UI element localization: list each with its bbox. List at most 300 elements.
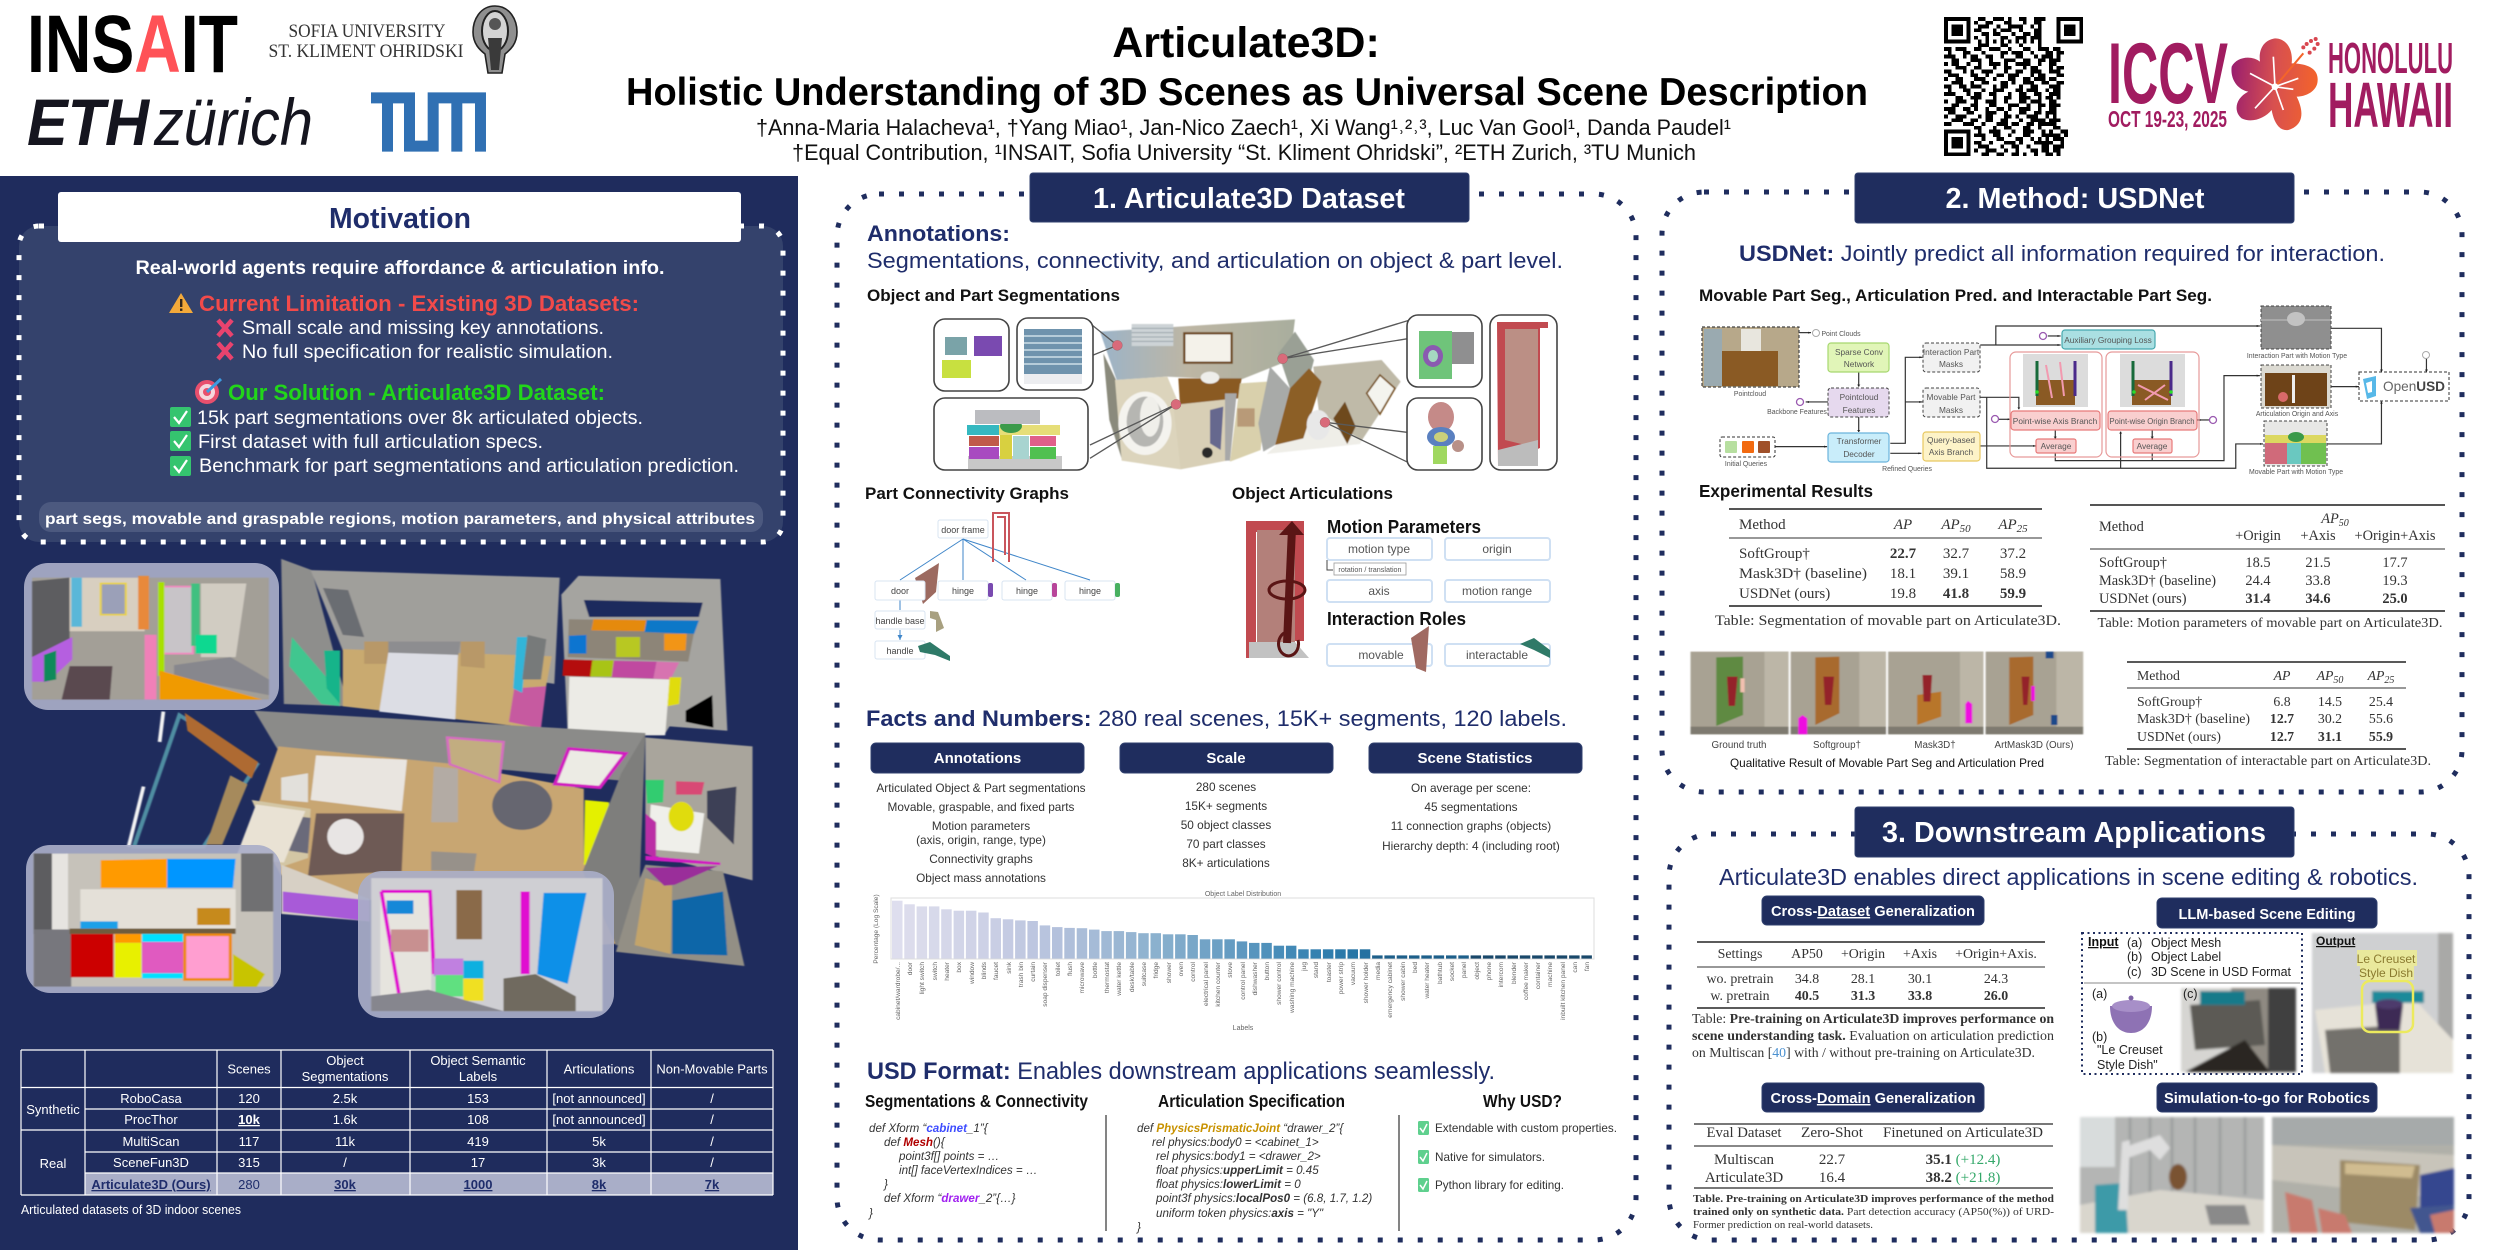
table: articulated datasets: 1.6k (333, 1112, 358, 1127)
diagram wires (1775, 326, 2426, 468)
diagram labels: Initial Queries (1725, 461, 1768, 468)
heading: why USD: Why USD? (1483, 1091, 1562, 1111)
table: interactable part segmentation: SoftGroup† (2137, 694, 2202, 709)
bar chart: object label distribution: container (1535, 961, 1542, 989)
inset: entrance (358, 871, 614, 1018)
column: annotations (871, 743, 1086, 885)
column: scale: Scale (1206, 750, 1246, 767)
table: articulated datasets: Object Semantic (430, 1053, 526, 1068)
text: agents: Real-world agents require affordance & articulation info. (136, 257, 664, 279)
table: interactable part segmentation: 12.7 (2270, 729, 2294, 744)
QR code (1944, 17, 2083, 156)
bar chart: object label distribution: door (907, 961, 914, 975)
text: annotations summary: Segmentations, connectivity, and articulation on object & part level. (867, 248, 1563, 273)
table: articulated datasets: 1000 (464, 1177, 492, 1192)
table: articulated datasets: / (710, 1134, 714, 1149)
table: articulated datasets: 153 (467, 1091, 489, 1106)
callout: toilet (1407, 398, 1482, 470)
bar chart: object label distribution: socket (1449, 962, 1456, 981)
panel: LLM input: Style Dish" (2097, 1058, 2158, 1072)
bar chart: object label distribution: water heater (1424, 961, 1431, 1000)
table: movable part segmentation: 25 (2017, 523, 2028, 535)
bar chart: object label distribution: bed (1412, 962, 1419, 973)
parameter chips: origin (1482, 542, 1512, 556)
bar chart: object label distribution: sink (1006, 961, 1013, 974)
table: interactable part segmentation: AP (2317, 668, 2333, 683)
table: articulated datasets: Segmentations (302, 1069, 389, 1084)
list: why USD: Native for simulators. (1435, 1151, 1545, 1164)
bar chart: object label distribution: fridge (1153, 962, 1160, 978)
bar chart: object label distribution: bathtub (1437, 962, 1444, 984)
qualitative results images: ArtMask3D (Ours) (1995, 740, 2073, 751)
table: articulated datasets: Scenes (227, 1062, 271, 1076)
diagram labels: Movable Part with Motion Type (2249, 469, 2343, 476)
bar chart: object label distribution: jug (1301, 962, 1308, 972)
table: articulated datasets: 3k (592, 1155, 606, 1170)
logo: ICCV Honolulu Hawaii: ICCV (2108, 26, 2228, 122)
table: articulated datasets: Real (40, 1156, 66, 1171)
code: articulation: uniform token physics:axis = "Y" (1156, 1207, 1324, 1220)
column: scene statistics: 45 segmentations (1424, 800, 1518, 814)
text: solution 1: 15k part segmentations over 8k articulated objects. (197, 407, 643, 429)
heading: our solution: Our Solution - Articulate3D Dataset: (228, 380, 605, 405)
table: motion parameters: +Origin (2235, 528, 2281, 544)
graph: part connectivity: handle (886, 646, 914, 656)
graph: part connectivity: door (891, 586, 909, 596)
parameter chips: motion type (1348, 542, 1410, 556)
table: motion parameters: 19.3 (2382, 573, 2408, 589)
authors: †Anna-Maria Halacheva¹, †Yang Miao¹, Jan-Nico Zaech¹, Xi Wang¹˒²˒³, Luc Van Gool¹, Danda Paudel¹ (756, 115, 1731, 140)
text: solution 3: Benchmark for part segmentations and articulation prediction. (199, 455, 739, 477)
heading: motion parameters: Motion Parameters (1327, 517, 1481, 537)
heading: method diagram: Movable Part Seg., Articulation Pred. and Interactable Part Seg. (1699, 286, 2212, 305)
graph: part connectivity: hinge (1079, 586, 1101, 596)
bar chart: object label distribution: water kettle (1116, 962, 1123, 997)
branch blocks: Average (2041, 441, 2072, 451)
table: motion parameters: AP (2321, 511, 2339, 527)
callout: bottles (934, 319, 1009, 391)
panel: LLM input: (a) (2092, 987, 2107, 1001)
bar chart: object label distribution: machine (1547, 962, 1554, 987)
table: cross-dataset: 40.5 (1795, 989, 1819, 1004)
bar chart: object label distribution: flush (1067, 962, 1074, 976)
living room wall and floor (254, 711, 645, 782)
section header 1: 1. Articulate3D Dataset (1093, 183, 1405, 215)
panel: 3. Downstream Applications (1669, 807, 2469, 1240)
code: segmentations (868, 1122, 1037, 1220)
callout: door (1490, 315, 1557, 470)
subheader: simulation for robotics: Simulation-to-go for Robotics (2164, 1091, 2370, 1107)
role chips: movable (1358, 648, 1404, 662)
column: scale (1120, 743, 1333, 870)
icon: cross (218, 343, 232, 359)
table: interactable part segmentation: Mask3D† (baseline) (2137, 711, 2250, 727)
code: articulation (1136, 1122, 1372, 1234)
column: scale: 50 object classes (1181, 818, 1271, 832)
table: interactable part segmentation: 25 (2384, 675, 2394, 686)
bar chart: object label distribution: shower (1166, 961, 1173, 983)
panel: 1. Articulate3D Dataset (837, 173, 1636, 1240)
code: segmentations: def Xform “cabinet_1”{ (869, 1122, 989, 1135)
callout: blinds (1017, 318, 1093, 390)
table: cross-domain: 16.4 (1819, 1170, 1846, 1186)
table: cross-domain: Eval Dataset (1706, 1125, 1782, 1141)
table: interactable part segmentation: 31.1 (2318, 729, 2342, 744)
output: movable part (2264, 421, 2327, 466)
bar chart: object label distribution: control panel (1240, 961, 1247, 1000)
figure: 3D scene reconstruction (129, 559, 753, 966)
bar chart: object label distribution: media (1375, 962, 1382, 980)
photo: input scene: (c) (2183, 987, 2198, 1001)
windows on the left (134, 715, 257, 847)
heading: interaction roles: Interaction Roles (1327, 609, 1466, 629)
table: cross-dataset: +Axis (1903, 947, 1937, 962)
caption: cross-dataset: Table: Pre-training on Articulate3D improves performance on (1692, 1011, 2054, 1026)
bar chart: object label distribution: switch (932, 962, 939, 980)
title (626, 19, 1868, 114)
role chips (1327, 626, 1550, 672)
panel: LLM input: (b) (2092, 1030, 2107, 1044)
heading: articulation specification: Articulation Specification (1158, 1091, 1345, 1111)
diagram labels: Interaction Part with Motion Type (2247, 353, 2347, 360)
code: articulation: def PhysicsPrismaticJoint “drawer_2”{ (1137, 1122, 1344, 1135)
network blocks: Features (1843, 405, 1875, 415)
graph: part connectivity: hinge (1016, 586, 1038, 596)
column: annotations: Movable, graspable, and fixed parts (888, 800, 1075, 814)
subheader: cross-dataset: Cross-Dataset Generalization (1771, 904, 1975, 920)
bar chart: object label distribution: coffee maker (1523, 961, 1530, 1000)
table: cross-dataset: 31.3 (1851, 989, 1875, 1004)
bar chart: object label distribution: faucet (993, 962, 1000, 980)
column: annotations: Connectivity graphs (929, 852, 1033, 866)
panel: 2. Method USDNet (1662, 173, 2462, 792)
heading: annotations: Annotations: (867, 221, 1010, 246)
affiliations: †Equal Contribution, ¹INSAIT, Sofia University “St. Kliment Ohridski”, ²ETH Zurich, ³TU Munich (792, 140, 1696, 165)
table: cross-domain: 22.7 (1819, 1152, 1846, 1168)
bar chart: object label distribution: button (1264, 962, 1271, 980)
bar chart: object label distribution: blender (1511, 961, 1518, 984)
table: motion parameters: +Origin+Axis (2354, 528, 2436, 544)
table: motion parameters: +Axis (2300, 528, 2336, 544)
role chips: interactable (1466, 648, 1528, 662)
code: articulation: rel physics:body0 = <cabinet_1> (1152, 1136, 1319, 1149)
table: motion parameters: 24.4 (2245, 573, 2271, 589)
table: cross-domain: Zero-Shot (1801, 1125, 1864, 1141)
caption: qualitative result: Qualitative Result of Movable Part Seg and Articulation Pred (1730, 756, 2044, 770)
column: annotations: Object mass annotations (916, 871, 1046, 885)
bar chart: object label distribution: window (969, 962, 976, 985)
output: interaction part (2261, 306, 2331, 349)
table: movable part segmentation: 58.9 (2000, 566, 2026, 582)
table: interactable part segmentation: 55.6 (2369, 711, 2393, 726)
heading: applications summary: Articulate3D enables direct applications in scene editing & robotics. (1719, 864, 2418, 890)
table: movable part segmentation: AP (1893, 517, 1912, 533)
table: interactable part segmentation: 30.2 (2318, 711, 2342, 726)
code: segmentations: def Mesh(){ (884, 1136, 946, 1149)
list: why USD (1418, 1121, 1617, 1192)
code: articulation: float physics:lowerLimit = 0 (1156, 1178, 1301, 1191)
qualitative results images (1691, 652, 2083, 751)
table: articulated datasets: Synthetic (26, 1102, 80, 1117)
output: articulation (2261, 365, 2331, 408)
inset: kitchen (26, 845, 281, 993)
table: articulated datasets: / (710, 1091, 714, 1106)
logo: ETH Zurich: zürich (153, 85, 313, 159)
table: movable part segmentation: 39.1 (1943, 566, 1969, 582)
table: cross-dataset: AP50 (1791, 947, 1823, 962)
table: cross-dataset: 34.8 (1795, 972, 1819, 987)
section header 3 (1855, 807, 2294, 857)
branch blocks: Point-wise Axis Branch (2013, 416, 2098, 426)
table: articulated datasets: Labels (459, 1069, 498, 1084)
bar chart: object label distribution: box (956, 961, 963, 973)
bar chart: object label distribution: panel (1461, 961, 1468, 978)
table: movable part segmentation: Mask3D† (baseline) (1739, 566, 1867, 582)
table: articulated datasets: 30k (334, 1177, 357, 1192)
table: articulated datasets: 17 (471, 1155, 485, 1170)
bar chart: object label distribution: intercom (1498, 962, 1505, 987)
bar chart: object label distribution: fan (1584, 962, 1591, 971)
table: articulated datasets: Articulate3D (Ours) (91, 1177, 211, 1192)
caption: cross-domain (1693, 1193, 2054, 1231)
table: motion parameters: 34.6 (2305, 591, 2331, 607)
table: movable part segmentation: 41.8 (1943, 586, 1969, 602)
table: motion parameters (2090, 505, 2445, 611)
caption: cross-domain: Table. Pre-training on Articulate3D improves performance of the method (1693, 1193, 2054, 1205)
subheader: simulation for robotics (2157, 1083, 2377, 1112)
bar chart: object label distribution: suitcase (1141, 962, 1148, 986)
heading: experimental results: Experimental Results (1699, 481, 1873, 501)
diagram labels: Point Clouds (1821, 331, 1861, 338)
table: cross-domain (1694, 1124, 2053, 1188)
pointcloud image (1702, 327, 1799, 387)
network blocks: Movable Part (1927, 392, 1976, 402)
bar chart: object label distribution: bottle (1092, 962, 1099, 978)
table: interactable part segmentation: USDNet (ours) (2137, 729, 2221, 745)
panel: LLM input: "Le Creuset (2097, 1043, 2163, 1057)
bar chart: object label distribution: electrical panel (1203, 961, 1210, 1006)
table: articulated datasets: / (343, 1155, 347, 1170)
table: movable part segmentation: USDNet (ours) (1739, 586, 1830, 602)
photo: robotics scene (2272, 1117, 2454, 1233)
table: articulated datasets: 7k (705, 1177, 720, 1192)
qualitative results images: Ground truth (1711, 740, 1767, 751)
table: movable part segmentation: 50 (1960, 523, 1971, 535)
column: annotations: Articulated Object & Part segmentations (876, 781, 1086, 795)
bar chart: object label distribution: blinds (981, 961, 988, 979)
table: articulated datasets: Articulations (564, 1062, 635, 1076)
photo: LLM output: Le Creuset (2357, 952, 2416, 966)
table: movable part segmentation: 18.1 (1890, 566, 1916, 582)
bar chart: object label distribution: washing machine (1289, 962, 1296, 1014)
table: cross-dataset: w. pretrain (1710, 989, 1770, 1004)
callout: annotation list: part segs, movable and graspable regions, motion parameters, and physical attributes (45, 511, 755, 528)
table: interactable part segmentation: 25.4 (2369, 694, 2393, 709)
table: articulated datasets (21, 1050, 773, 1195)
caption: datasets table: Articulated datasets of 3D indoor scenes (21, 1202, 241, 1217)
table: movable part segmentation: 37.2 (2000, 546, 2026, 562)
parameter chips: rotation / translation (1338, 565, 1402, 574)
table: cross-dataset (1697, 942, 2045, 1008)
network blocks: Sparse Conv (1835, 347, 1884, 357)
network blocks: Auxiliary Grouping Loss (2064, 335, 2152, 345)
parameter chips: motion range (1462, 584, 1532, 598)
table: movable part segmentation: 59.9 (2000, 586, 2026, 602)
caption: cross-domain: Former prediction on real-world datasets. (1693, 1219, 1873, 1231)
right wall (583, 733, 645, 945)
branch blocks (1992, 411, 2216, 453)
code: articulation: } (1136, 1221, 1141, 1234)
table: articulated datasets: [not announced] (552, 1112, 646, 1127)
panel: LLM input: (a) (2127, 936, 2142, 950)
icon: warning (169, 293, 193, 313)
bar chart: object label distribution: stand (1313, 962, 1320, 978)
table: articulated datasets: 315 (238, 1155, 260, 1170)
table: interactable part segmentation: 12.7 (2270, 711, 2294, 726)
table: motion parameters: 21.5 (2305, 555, 2331, 571)
table: cross-dataset: 24.3 (1984, 972, 2008, 987)
graph: part connectivity (875, 513, 1120, 661)
icon: check (170, 456, 191, 476)
table: cross-dataset: 26.0 (1984, 989, 2008, 1004)
panel: LLM input (2082, 933, 2302, 1074)
inset: living room (24, 563, 279, 710)
bar chart: object label distribution: toilet (1055, 962, 1062, 976)
list: why USD: Python library for editing. (1435, 1179, 1564, 1192)
photo: input scene (2181, 987, 2296, 1072)
caption: motion parameters: Table: Motion parameters of movable part on Articulate3D. (2098, 616, 2442, 631)
table: cross-dataset: 33.8 (1908, 989, 1932, 1004)
caption: interactable segmentation: Table: Segmentation of interactable part on Articulate3D. (2105, 753, 2431, 768)
table: motion parameters: 18.5 (2245, 555, 2271, 571)
subheader: cross-domain (1762, 1083, 1984, 1112)
bar chart: object label distribution: inbuilt kitchen panel (1560, 961, 1567, 1020)
logo: Sofia University: SOFIA UNIVERSITY (288, 22, 446, 42)
bar chart: object label distribution: object (1474, 962, 1481, 980)
column: annotations: Motion parameters (932, 819, 1030, 833)
photo: LLM output (2312, 933, 2453, 1073)
heading: current limitation: Current Limitation - Existing 3D Datasets: (199, 291, 639, 316)
logo: Sofia University: ST. KLIMENT OHRIDSKI (268, 42, 464, 62)
bar chart: object label distribution: control (1190, 961, 1197, 982)
section header 1 (1030, 173, 1469, 222)
table: movable part segmentation: 32.7 (1943, 546, 1970, 562)
caption: cross-dataset (1692, 1011, 2054, 1060)
table: cross-dataset: +Origin+Axis. (1955, 947, 2037, 962)
diagram labels: Articulation Origin and Axis (2256, 411, 2339, 418)
code: segmentations: def Xform “drawer_2”{…} (884, 1192, 1016, 1205)
heading: USDNet summary: USDNet: Jointly predict all information required for interaction. (1739, 241, 2385, 266)
table: interactable part segmentation: 55.9 (2369, 729, 2393, 744)
icon: check (170, 407, 191, 427)
lower wall (281, 865, 370, 921)
table: articulated datasets: 280 (238, 1177, 260, 1192)
axis branch image (2023, 354, 2088, 407)
network blocks: Pointcloud (1840, 392, 1879, 402)
branch blocks: Average (2137, 441, 2168, 451)
column: scene statistics (1369, 743, 1582, 853)
logo: INSAIT: INSAIT (27, 0, 238, 90)
text: solution 2: First dataset with full articulation specs. (198, 431, 543, 453)
table: articulated datasets: 2.5k (333, 1091, 358, 1106)
photo: LLM output: Output (2316, 934, 2355, 948)
bathroom (645, 737, 753, 880)
table: cross-domain: Finetuned on Articulate3D (1883, 1125, 2043, 1141)
title: Holistic Understanding of 3D Scenes as Universal Scene Description (626, 71, 1868, 114)
subheader: cross-domain: Cross-Domain Generalization (1770, 1091, 1976, 1107)
figure: object articulation door (1246, 521, 1309, 658)
bar chart: object label distribution: can (1572, 962, 1579, 973)
bar chart: object label distribution: cabinet/wardrobe/... (895, 962, 902, 1020)
table: articulated datasets: 120 (238, 1091, 260, 1106)
table: interactable part segmentation: 50 (2333, 675, 2343, 686)
panel: LLM input: (b) (2127, 950, 2142, 964)
bar chart: object label distribution (873, 891, 1594, 1032)
table: motion parameters: Mask3D† (baseline) (2099, 573, 2216, 589)
network blocks: Axis Branch (1929, 447, 1974, 457)
bar chart: object label distribution: dishwasher (1252, 961, 1259, 995)
OpenUSD block (2359, 352, 2449, 401)
table: motion parameters: 31.4 (2245, 591, 2271, 607)
diagram labels: Refined Queries (1882, 466, 1932, 473)
bar chart: object label distribution: heater (944, 961, 951, 981)
heading: USD format: USD Format: Enables downstream applications seamlessly. (867, 1058, 1495, 1085)
parameter chips: axis (1368, 584, 1390, 598)
section header 2: 2. Method: USDNet (1946, 183, 2205, 215)
table: motion parameters: Method (2099, 519, 2145, 535)
table: articulated datasets: SceneFun3D (113, 1155, 189, 1170)
table: articulated datasets: RoboCasa (120, 1091, 182, 1106)
logo: TUM (371, 92, 486, 152)
bar chart: object label distribution: desk/table (1129, 962, 1136, 992)
table: interactable part segmentation: AP (2368, 668, 2384, 683)
table: articulated datasets: 117 (239, 1134, 259, 1149)
graph: part connectivity: handle base (875, 616, 925, 626)
photo: robot arm (2080, 1117, 2264, 1233)
heading: motivation: Motivation (329, 203, 471, 235)
figure: segmentation scene and callouts (934, 315, 1557, 470)
code: articulation: point3f physics:localPos0 = (6.8, 1.7, 1.2) (1155, 1192, 1372, 1205)
code: segmentations: int[] faceVertexIndices = … (899, 1164, 1037, 1177)
qualitative results images: Mask3D† (1914, 740, 1956, 751)
heading: motivation (58, 192, 741, 242)
diagram: USDNet architecture (1702, 306, 2449, 476)
subheader: cross-dataset (1762, 896, 1984, 925)
network blocks: Network (1844, 359, 1875, 369)
code: segmentations: } (868, 1207, 873, 1220)
code: articulation: float physics:upperLimit = 0.45 (1156, 1164, 1319, 1177)
bar chart: object label distribution: shower control (1276, 961, 1283, 1005)
table: articulated datasets: ProcThor (124, 1112, 178, 1127)
table: movable part segmentation: 22.7 (1890, 546, 1917, 562)
logo: Sofia University (268, 6, 517, 73)
photo: LLM output: Style Dish (2359, 966, 2413, 980)
logo: ETH Zurich (27, 85, 313, 159)
caption: movable segmentation: Table: Segmentation of movable part on Articulate3D. (1715, 612, 2061, 629)
table: movable part segmentation: SoftGroup† (1739, 546, 1810, 562)
table: articulated datasets: 10k (238, 1112, 261, 1127)
table: motion parameters: 17.7 (2382, 555, 2408, 571)
code: segmentations: } (883, 1178, 888, 1191)
table: interactable part segmentation: 14.5 (2318, 694, 2342, 709)
column: scene statistics: Scene Statistics (1417, 750, 1533, 767)
bar chart: object label distribution: Percentage (Log Scale) (873, 894, 880, 964)
table: articulated datasets: 11k (335, 1134, 355, 1149)
bar chart: object label distribution: shower holder (1363, 961, 1370, 1003)
column: scale: 280 scenes (1196, 780, 1256, 794)
panel: LLM input: Input (2088, 935, 2119, 949)
network blocks: Decoder (1843, 449, 1875, 459)
